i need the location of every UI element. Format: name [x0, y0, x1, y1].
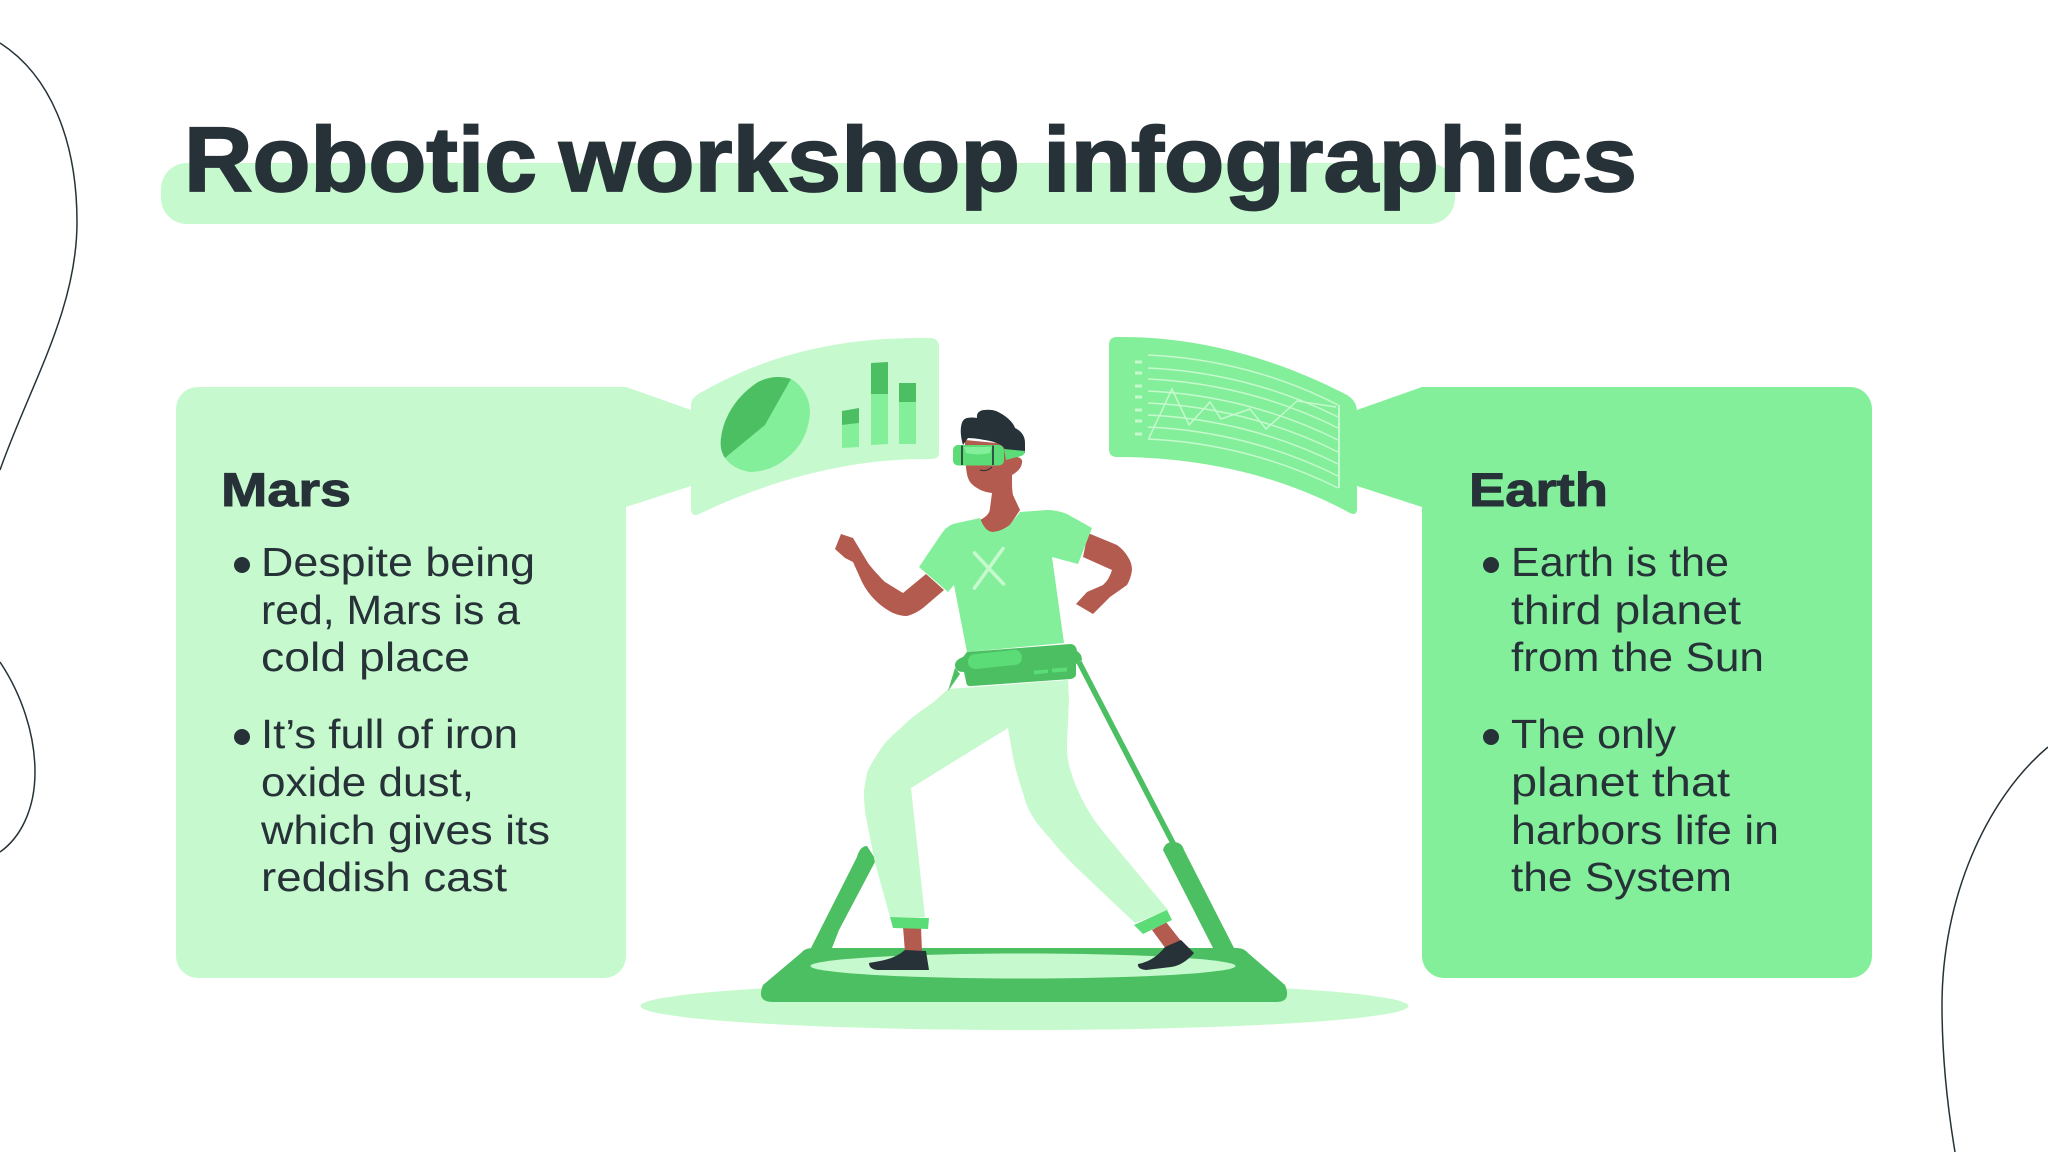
bullet list: Earth — [1483, 539, 1779, 900]
title highlight pill — [161, 163, 1455, 224]
person in VR headset — [835, 410, 1194, 970]
VR headset — [953, 445, 1025, 471]
shirt X logo — [974, 548, 1004, 588]
bullet list: Mars: oxide dust, — [261, 759, 474, 805]
trousers — [864, 680, 1168, 923]
ground shadow — [640, 982, 1408, 1030]
title: infographics — [1043, 109, 1637, 211]
belt buttons — [1034, 668, 1067, 674]
headset bands — [962, 446, 993, 465]
pie chart — [721, 377, 810, 472]
frame legs — [811, 842, 1234, 948]
bullet list: Mars: reddish cast — [261, 854, 508, 900]
platform base — [761, 948, 1287, 1002]
smile — [980, 467, 992, 471]
panel: Mars — [176, 387, 694, 978]
screen background: left — [691, 338, 939, 515]
belt left strap — [948, 668, 960, 691]
holographic screen: pie and bar charts — [691, 338, 939, 515]
bullet list: Mars — [234, 539, 550, 900]
platform disc — [810, 954, 1236, 978]
bullet list: Earth: the System — [1511, 854, 1732, 900]
bullet list: Mars: Despite being — [261, 539, 535, 585]
bullet list: Mars: red, Mars is a — [261, 587, 520, 633]
bullet list: Earth: The only — [1511, 711, 1677, 757]
t-shirt — [919, 510, 1092, 652]
strap from belt to frame — [1079, 662, 1174, 845]
left arm — [835, 534, 944, 616]
trouser cuffs — [890, 910, 1172, 934]
panel shape: Mars — [176, 387, 694, 978]
belt body — [955, 644, 1082, 686]
headset strap — [1004, 449, 1025, 460]
title: workshop — [558, 109, 1020, 211]
ankles — [903, 922, 1181, 952]
holographic screen: line chart — [1109, 337, 1357, 514]
headset highlight — [964, 447, 992, 454]
bar chart — [842, 362, 916, 448]
right arm — [1076, 533, 1132, 614]
bullet list: Mars: It’s full of iron — [261, 711, 518, 757]
neck and head — [965, 440, 1022, 532]
panel shape: Earth — [1354, 387, 1872, 978]
belt — [948, 644, 1082, 691]
platform with frame — [761, 842, 1287, 1002]
bullet list: Earth: from the Sun — [1511, 634, 1764, 680]
shoes — [869, 940, 1194, 970]
bullet list: Earth: planet that — [1511, 759, 1731, 805]
line chart — [1135, 355, 1339, 488]
heading: Earth: Earth — [1469, 463, 1608, 516]
heading: Mars: Mars — [221, 463, 351, 516]
belt display — [967, 649, 1023, 670]
hair — [961, 410, 1025, 453]
bullet list: Earth: harbors life in — [1511, 807, 1779, 853]
title: Robotic — [184, 109, 537, 211]
bullet list: Earth: Earth is the — [1511, 539, 1729, 585]
screen background: right — [1109, 337, 1357, 514]
title — [184, 109, 1637, 211]
headset body — [953, 445, 1004, 466]
bullet list: Earth: third planet — [1511, 587, 1742, 633]
bullet list: Mars: which gives its — [260, 807, 550, 853]
panel: Earth — [1354, 387, 1872, 978]
bullet list: Mars: cold place — [261, 634, 470, 680]
